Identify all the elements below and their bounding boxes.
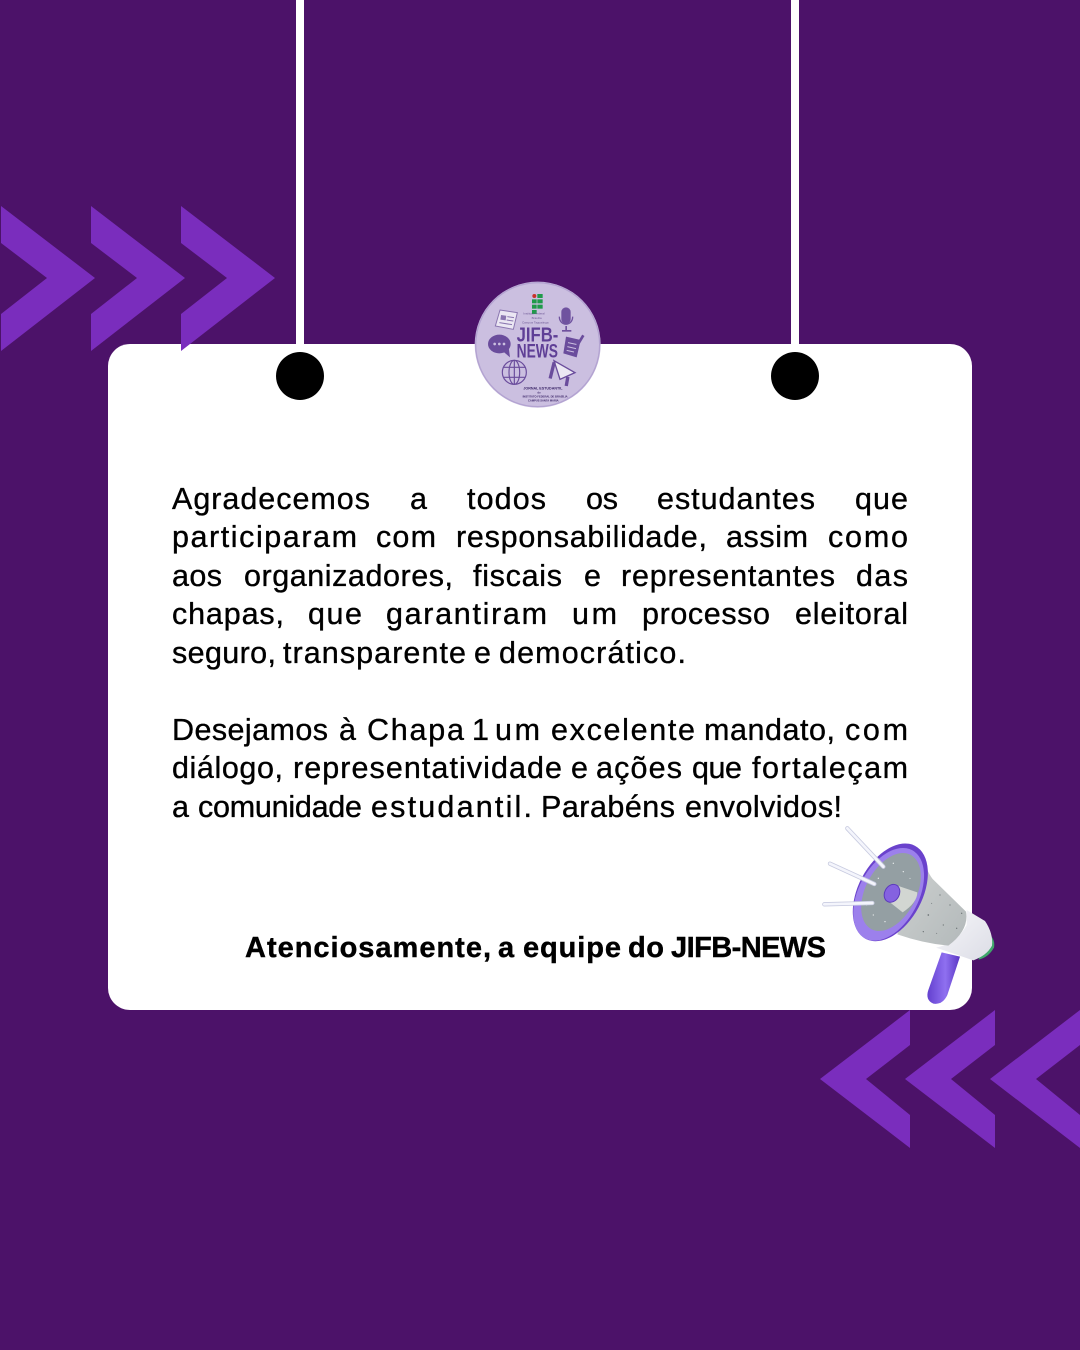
bell speckles bbox=[866, 863, 910, 922]
text block: thanks paragraph: os bbox=[586, 482, 618, 516]
pin left bbox=[276, 352, 324, 400]
logo: JIFB-NEWS badge: Instituto Federal bbox=[523, 312, 545, 316]
logo: JIFB-NEWS badge bbox=[475, 282, 601, 408]
text block: wishes paragraph bbox=[172, 713, 908, 824]
signature: JIFB-NEWS bbox=[671, 932, 826, 964]
text block: thanks paragraph: transparente bbox=[283, 636, 466, 670]
hanging string right bbox=[791, 0, 799, 346]
text block: wishes paragraph: envolvidos! bbox=[685, 790, 842, 824]
text block: wishes paragraph: ações bbox=[596, 751, 682, 785]
chevrons top left bbox=[1, 206, 275, 351]
logo: JIFB-NEWS badge: Brasília bbox=[532, 316, 542, 320]
text block: thanks paragraph: assim bbox=[726, 520, 808, 554]
text block: thanks paragraph: chapas, bbox=[172, 597, 284, 631]
icon: globe bbox=[502, 360, 526, 384]
cone body bbox=[897, 850, 966, 946]
rim bbox=[837, 831, 943, 954]
text block: wishes paragraph: que bbox=[692, 751, 742, 785]
text block: thanks paragraph: e bbox=[584, 559, 601, 593]
text block: thanks paragraph: responsabilidade, bbox=[456, 520, 707, 554]
handle bbox=[927, 952, 960, 1004]
logo: JIFB-NEWS badge: CAMPUS SANTA MARIA bbox=[528, 398, 559, 402]
text block: wishes paragraph: 1 bbox=[472, 713, 489, 747]
text block: thanks paragraph: como bbox=[828, 520, 908, 554]
text block: thanks paragraph: processo bbox=[642, 597, 770, 631]
signature: do bbox=[628, 932, 664, 964]
icon: megaphone small bbox=[549, 361, 575, 386]
signature: equipe bbox=[523, 932, 621, 964]
text block: thanks paragraph: das bbox=[856, 559, 908, 593]
text block: thanks paragraph: que bbox=[855, 482, 908, 516]
text block: thanks paragraph: eleitoral bbox=[795, 597, 908, 631]
icon: document and pen bbox=[563, 335, 583, 357]
text block: wishes paragraph: excelente bbox=[551, 713, 695, 747]
panel: white card bbox=[108, 344, 972, 1010]
logo: JIFB-NEWS badge: NEWS bbox=[517, 341, 558, 362]
text block: wishes paragraph: à bbox=[339, 713, 356, 747]
text block: thanks paragraph: todos bbox=[467, 482, 546, 516]
cone speckles bbox=[923, 894, 962, 934]
text block: thanks paragraph bbox=[172, 482, 908, 670]
text block: thanks paragraph: e bbox=[474, 636, 491, 670]
text block: wishes paragraph: comunidade bbox=[198, 790, 362, 824]
icon: speech bubble bbox=[488, 335, 511, 357]
signature: a bbox=[498, 932, 515, 964]
text block: thanks paragraph: aos bbox=[172, 559, 222, 593]
text block: thanks paragraph: estudantes bbox=[657, 482, 815, 516]
icon: megaphone bbox=[824, 828, 994, 1004]
icon: newspaper bbox=[495, 310, 517, 329]
text block: thanks paragraph: fiscais bbox=[473, 559, 562, 593]
text block: thanks paragraph: garantiram bbox=[386, 597, 547, 631]
pin right bbox=[771, 352, 819, 400]
text block: wishes paragraph: Parabéns bbox=[541, 790, 675, 824]
text block: thanks paragraph: seguro, bbox=[172, 636, 276, 670]
logo: JIFB-NEWS badge: do bbox=[537, 390, 541, 394]
text block: thanks paragraph: com bbox=[376, 520, 436, 554]
text block: thanks paragraph: a bbox=[410, 482, 427, 516]
text block: wishes paragraph: estudantil. bbox=[371, 790, 532, 824]
text block: thanks paragraph: democrático. bbox=[499, 636, 686, 670]
icon: institute mark bbox=[532, 294, 543, 314]
text block: wishes paragraph: Chapa bbox=[367, 713, 464, 747]
green end cap bbox=[978, 935, 994, 960]
driver bbox=[881, 882, 903, 905]
hanging string left bbox=[296, 0, 304, 346]
text block: thanks paragraph: que bbox=[308, 597, 362, 631]
text block: wishes paragraph: representatividade bbox=[293, 751, 562, 785]
text block: wishes paragraph: e bbox=[571, 751, 588, 785]
logo caption: JORNAL ESTUDANTIL bbox=[523, 386, 563, 390]
text block: thanks paragraph: Agradecemos bbox=[172, 482, 370, 516]
text block: thanks paragraph: organizadores, bbox=[244, 559, 453, 593]
text block: thanks paragraph: um bbox=[572, 597, 617, 631]
chevrons bottom right bbox=[820, 1010, 1080, 1148]
signature bbox=[245, 932, 826, 964]
text block: thanks paragraph: representantes bbox=[621, 559, 835, 593]
text block: thanks paragraph: participaram bbox=[172, 520, 357, 554]
text block: wishes paragraph: fortaleçam bbox=[752, 751, 908, 785]
text block: wishes paragraph: a bbox=[172, 790, 189, 824]
sound rays bbox=[824, 828, 883, 904]
icon: microphone bbox=[559, 307, 573, 332]
white cylinder bbox=[936, 910, 992, 960]
inner bell bbox=[849, 843, 933, 941]
text block: wishes paragraph: com bbox=[845, 713, 908, 747]
signature: Atenciosamente, bbox=[245, 932, 491, 964]
text block: wishes paragraph: diálogo, bbox=[172, 751, 283, 785]
logo wordmark: JIFB- bbox=[517, 324, 558, 346]
text block: wishes paragraph: um bbox=[495, 713, 540, 747]
logo: JIFB-NEWS badge: INSTITUTO FEDERAL DE BRASÍLIA bbox=[523, 393, 568, 398]
logo: JIFB-NEWS badge: Campus Taguatinga bbox=[522, 320, 549, 324]
text block: wishes paragraph: Desejamos bbox=[172, 713, 328, 747]
text block: wishes paragraph: mandato, bbox=[704, 713, 835, 747]
